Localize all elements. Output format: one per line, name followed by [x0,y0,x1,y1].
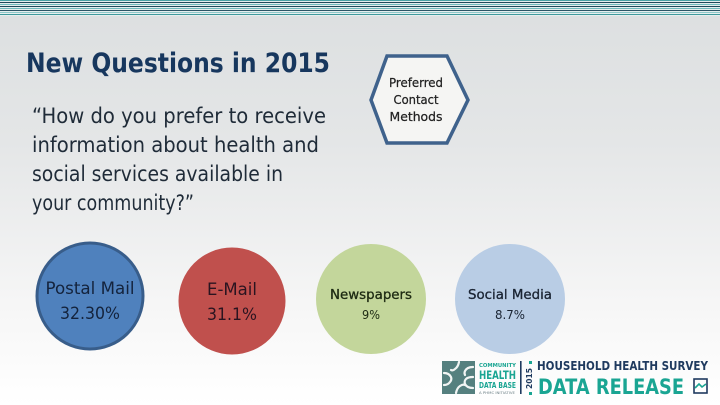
logo: community health data base household health survey: 2015 [525,368,534,389]
hexagon: preferred contact methods: Contact [394,92,439,107]
logo panel [442,361,475,394]
question text: information about health and [32,133,319,157]
logo: community health data base household health survey: DATA BASE [479,381,516,390]
circle: social media: Social Media [468,288,552,303]
icon: chart box [694,379,707,393]
question text: social services available in [32,162,283,186]
header stripes [0,0,720,16]
circle: social media [455,244,565,354]
logo: community health data base household health survey [442,358,709,400]
logo: community health data base household health survey: DATA RELEASE [538,375,684,400]
circle: newspapers: 9% [362,307,380,322]
logo: community health data base household health survey: HEALTH [479,368,516,382]
hexagon: preferred contact methods [371,56,468,143]
logo: community health data base household health survey: COMMUNITY [479,363,517,369]
hexagon: preferred contact methods: Preferred [389,75,443,90]
logo icon [444,362,473,393]
circle: newspapers: Newspapers [330,288,412,303]
circle: social media: 8.7% [495,307,525,322]
circle: postal mail [37,243,143,349]
hexagon: preferred contact methods: Methods [390,109,442,124]
circle: newspapers [316,244,426,354]
circle: e-mail: 31.1% [207,305,257,325]
circle: e-mail: E-Mail [207,280,257,300]
circle: e-mail [178,248,286,354]
circle: postal mail: Postal Mail [46,279,134,299]
question text: your community?” [32,191,194,215]
title: New Questions in 2015 [26,48,330,79]
question text [32,104,326,215]
question text: “How do you prefer to receive [32,104,326,128]
circle: postal mail: 32.30% [60,304,120,324]
logo: community health data base household health survey: A PHMC INITIATIVE [479,391,515,395]
